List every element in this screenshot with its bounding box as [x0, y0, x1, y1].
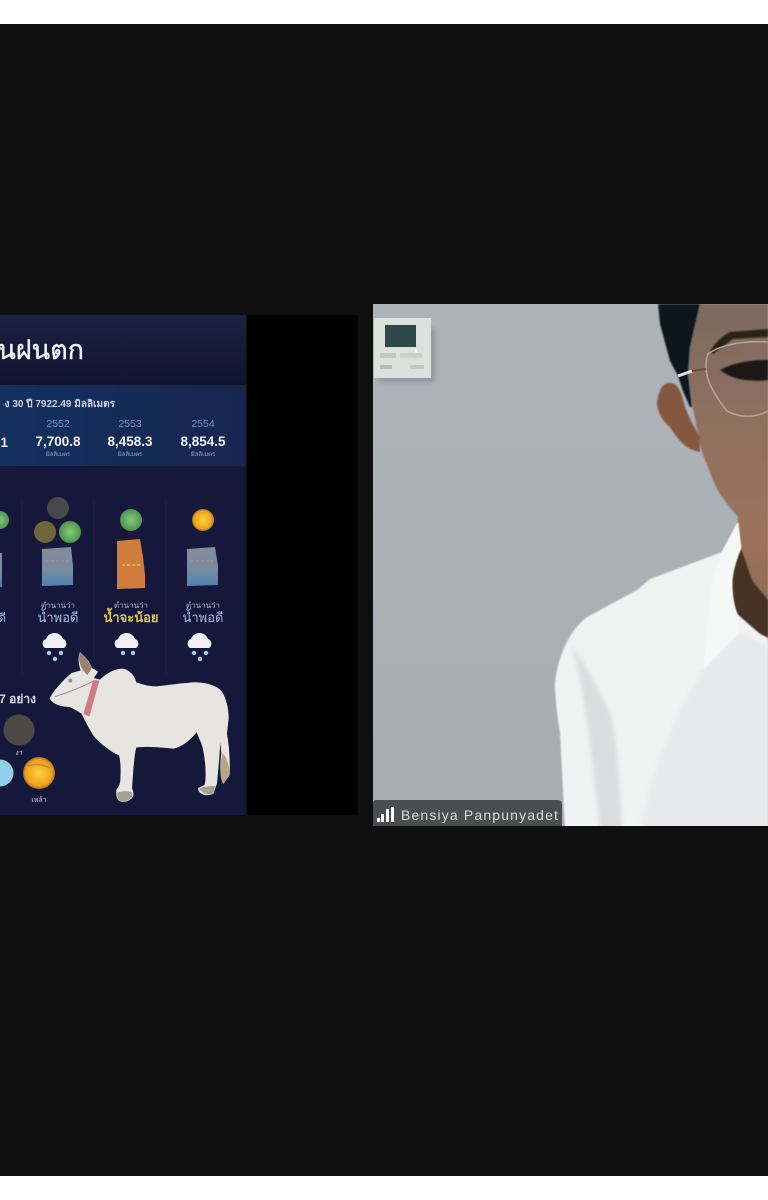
shirt sleeve shadow: [572, 645, 622, 830]
column: 2554 prediction: [182, 509, 224, 661]
face and neck: [688, 304, 768, 640]
column: partial left: [0, 511, 9, 625]
icon: orange cloth: [117, 539, 145, 589]
icon: yellow circle: [192, 509, 214, 531]
column: 2552 prediction: [34, 497, 81, 661]
food section heading: 7 อย่าง: [0, 692, 36, 706]
participant name: Bensiya Panpunyadet: [401, 807, 559, 823]
ear: [657, 383, 700, 452]
prediction label: ตำนานว่า: [114, 601, 148, 610]
eyebrow: [710, 329, 768, 354]
panel: shared slide black area: [247, 315, 358, 815]
year 2552: 7,700.8: [35, 434, 81, 449]
participant name tag: [373, 800, 562, 826]
icon: rain cloud: [188, 633, 211, 661]
year 2554: 8,854.5: [180, 434, 226, 449]
year 2553: 2553: [118, 418, 142, 430]
column: 2553 prediction: [103, 509, 159, 655]
icon: green circle: [120, 509, 142, 531]
year 2554: มิลลิเมตร: [191, 451, 216, 458]
neck shadow: [732, 548, 768, 638]
glasses: [678, 342, 768, 416]
prediction result: น้ำพอดี: [37, 608, 79, 625]
prediction result: น้ำจะน้อย: [103, 607, 159, 625]
year 2553: [108, 420, 152, 456]
shirt body shading: [640, 632, 768, 830]
icon: white cow: [50, 653, 229, 802]
white shirt: [555, 522, 768, 830]
year 2554: [180, 420, 226, 456]
average rainfall caption: ง 30 ปี 7922.49 มิลลิเมตร: [5, 398, 116, 410]
icon: rain cloud: [115, 633, 138, 655]
icon: wall thermostat: [374, 318, 435, 382]
person: [555, 304, 768, 830]
panel: rainfall slide: [0, 315, 246, 815]
year 2552: [36, 420, 80, 456]
slide header: [0, 315, 246, 385]
prediction label: ตำนานว่า: [41, 601, 75, 610]
icon: sesame: [4, 714, 34, 746]
year 2553: 8,458.3: [107, 434, 153, 449]
panel: participant video: [373, 304, 768, 830]
icon: liquor: [23, 757, 55, 789]
eye: [720, 360, 768, 381]
year 2553: มิลลิเมตร: [118, 451, 143, 458]
icon: water: [0, 760, 14, 786]
liquor label: เหล้า: [31, 796, 47, 804]
rainfall data band: [0, 385, 246, 466]
year 2552: 2552: [46, 418, 70, 430]
icon: blue cloth: [42, 547, 73, 586]
icon: grain circles: [34, 497, 81, 543]
sesame label: งา: [15, 750, 23, 757]
column dividers: [22, 500, 166, 675]
hair: [658, 304, 700, 407]
shirt collar: [703, 522, 741, 670]
prediction result: น้ำพอดี: [182, 608, 224, 625]
icon: blue cloth: [187, 547, 218, 586]
icon: signal bars: [377, 807, 394, 822]
year 2554: 2554: [191, 418, 215, 430]
icon: rain cloud: [43, 633, 66, 661]
year 2552: มิลลิเมตร: [46, 451, 71, 458]
wall background: [373, 304, 768, 826]
prediction label: ตำนานว่า: [186, 601, 220, 610]
